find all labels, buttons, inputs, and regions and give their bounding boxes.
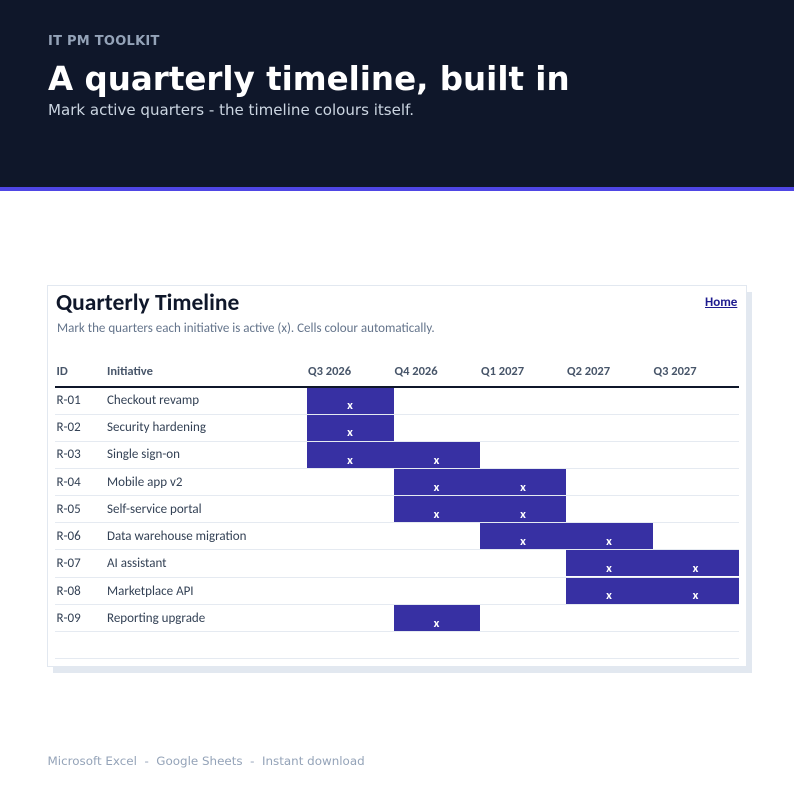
row R-03: Single sign-on [107, 447, 180, 462]
row R-06: R-06 [56, 529, 81, 544]
row R-03: R-03 [56, 447, 81, 462]
home link: Home [705, 295, 737, 310]
row R-05 [56, 496, 566, 522]
table header row: Initiative [107, 364, 153, 379]
row R-09: x [434, 616, 439, 631]
row R-04: x [520, 480, 526, 495]
row R-03: x [347, 453, 353, 468]
row R-08: x [693, 588, 698, 603]
row R-06: x [606, 534, 612, 549]
card surface [47, 285, 747, 667]
row R-08: R-08 [56, 584, 81, 599]
row R-04: Mobile app v2 [107, 474, 182, 490]
row dividers [55, 414, 739, 659]
row R-07 [56, 550, 739, 576]
row R-05: Self-service portal [107, 502, 202, 517]
subtitle: Mark active quarters - the timeline colours itself. [48, 101, 414, 119]
row R-04: R-04 [56, 474, 81, 490]
row R-06 [56, 523, 653, 549]
row R-05: x [434, 507, 439, 522]
header banner [0, 0, 794, 191]
row R-07: x [693, 561, 698, 576]
row R-08: x [606, 588, 612, 603]
table header row [55, 364, 739, 388]
row R-04: x [434, 480, 439, 495]
row R-09 [56, 605, 480, 631]
row R-06: Data warehouse migration [107, 529, 246, 544]
row R-02 [56, 415, 394, 441]
panel: spreadsheet card [47, 285, 752, 673]
row R-05: x [520, 507, 526, 522]
table header row: Q2 2027 [567, 364, 610, 379]
row R-07: x [606, 561, 612, 576]
row R-08 [56, 578, 739, 604]
row R-01: x [347, 398, 353, 413]
row R-07: AI assistant [107, 556, 167, 571]
row R-01: R-01 [56, 393, 81, 408]
table header row: Q3 2027 [654, 364, 697, 379]
row R-02: Security hardening [107, 420, 206, 435]
table header row: Q3 2026 [308, 364, 351, 379]
row R-07: R-07 [56, 556, 81, 571]
sheet description: Mark the quarters each initiative is active (x). Cells colour automatically. [57, 321, 435, 336]
row R-03 [56, 442, 480, 468]
main heading: A quarterly timeline, built in [48, 60, 570, 98]
table header row: Q1 2027 [481, 364, 524, 379]
row R-09: Reporting upgrade [107, 611, 205, 626]
row R-09: R-09 [56, 611, 81, 626]
card shadow [53, 292, 752, 673]
row R-02: R-02 [56, 420, 81, 435]
row R-06: x [520, 534, 526, 549]
row R-02: x [347, 425, 353, 440]
row R-01: Checkout revamp [107, 393, 199, 408]
sheet title: Quarterly Timeline [56, 289, 239, 317]
footer note: Microsoft Excel - Google Sheets - Instant download [48, 754, 365, 768]
row R-01 [56, 388, 394, 414]
eyebrow: IT PM TOOLKIT [48, 34, 160, 49]
row R-05: R-05 [56, 502, 81, 517]
row R-04 [56, 469, 566, 495]
table header row: ID [56, 364, 68, 379]
table header row: Q4 2026 [394, 364, 438, 379]
row R-03: x [434, 453, 439, 468]
row R-08: Marketplace API [107, 584, 194, 599]
